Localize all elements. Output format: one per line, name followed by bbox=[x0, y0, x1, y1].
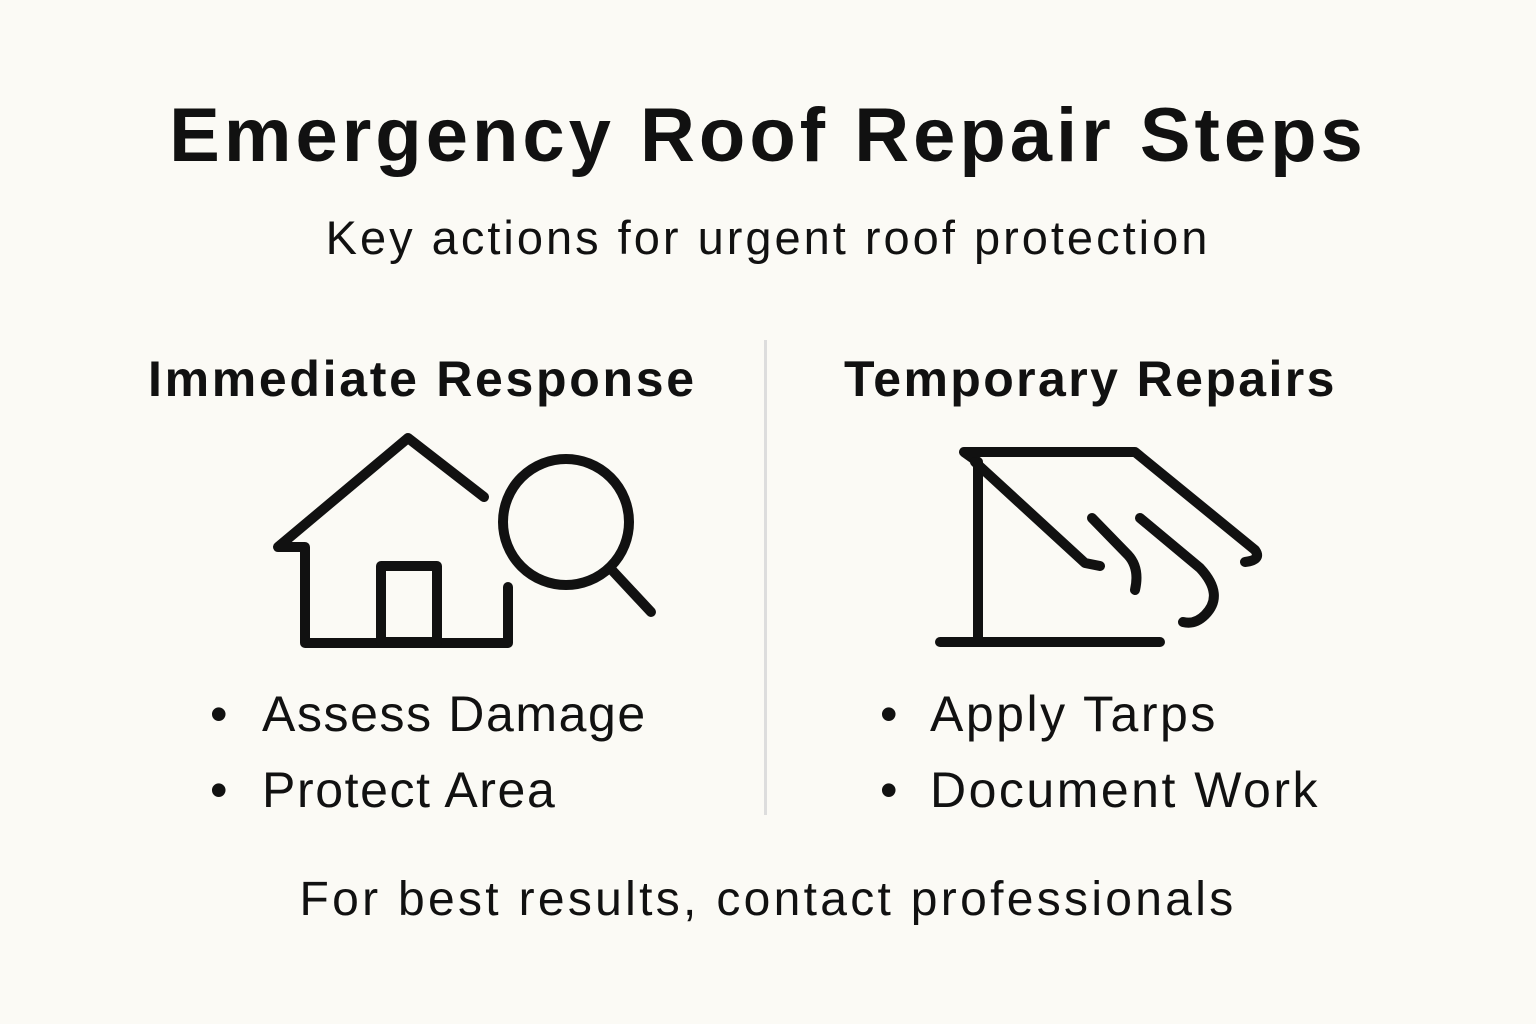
bullet list bbox=[210, 686, 647, 818]
bullet list: • bbox=[880, 762, 898, 818]
bullet list: • bbox=[210, 762, 228, 818]
icon: roof with tarp bbox=[935, 447, 1262, 647]
footer: For best results, contact professionals bbox=[299, 873, 1237, 926]
icon: house with magnifier bbox=[273, 433, 656, 648]
bullet list: • bbox=[210, 686, 228, 742]
panel: temporary repairs bbox=[844, 351, 1337, 818]
heading: immediate response: Immediate Response bbox=[148, 351, 697, 407]
bullet list: • bbox=[880, 686, 898, 742]
subtitle: Key actions for urgent roof protection bbox=[326, 211, 1210, 264]
bullet list: Protect Area bbox=[262, 762, 556, 818]
heading: temporary repairs: Temporary Repairs bbox=[844, 351, 1337, 407]
bullet list bbox=[880, 686, 1320, 818]
title: Emergency Roof Repair Steps bbox=[169, 93, 1367, 178]
bullet list: Document Work bbox=[930, 762, 1320, 818]
bullet list: Apply Tarps bbox=[930, 686, 1218, 742]
panel: immediate response bbox=[148, 351, 697, 818]
bullet list: Assess Damage bbox=[262, 686, 647, 742]
